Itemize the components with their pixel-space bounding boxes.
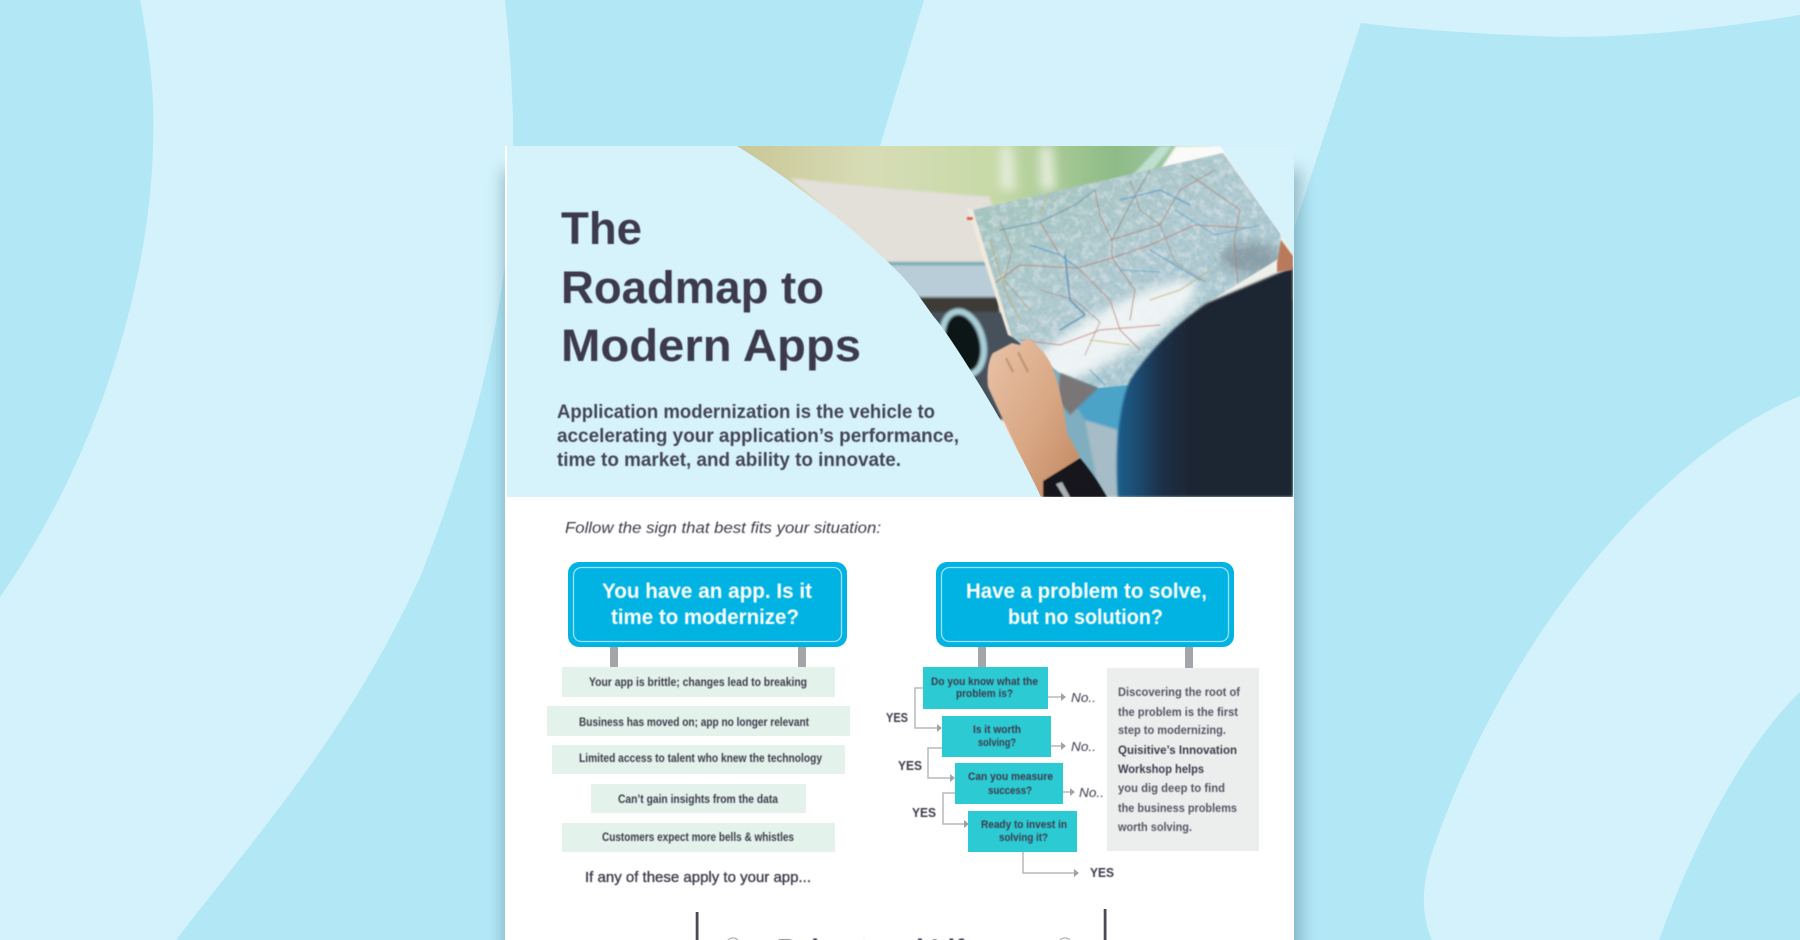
flowchart: problem questions: Is it worth <box>973 724 1021 736</box>
flowchart: problem questions: No.. <box>1079 786 1104 800</box>
intro text: accelerating your application’s performance, <box>557 425 959 447</box>
title: The <box>561 203 642 254</box>
next sign frame, cropped at the page edge <box>696 909 1106 940</box>
panel: symptom list: Can’t gain insights from the data <box>618 794 779 806</box>
panel: symptom list: Limited access to talent who knew the technology <box>579 753 823 765</box>
flowchart: problem questions: Can you measure <box>968 771 1053 783</box>
flowchart: problem questions: YES <box>898 758 922 773</box>
intro text <box>557 401 959 471</box>
flowchart: problem questions: YES <box>1090 865 1114 880</box>
sign: have a problem: but no solution? <box>1008 605 1163 629</box>
map paper <box>966 152 1282 389</box>
panel: workshop note <box>1107 668 1259 851</box>
panel: workshop note: step to modernizing. <box>1118 723 1226 737</box>
intro text: Application modernization is the vehicle to <box>557 401 935 423</box>
flowchart: problem questions: Do you know what the <box>931 676 1038 688</box>
panel: header <box>507 135 1300 500</box>
panel: workshop note: you dig deep to find <box>1118 781 1225 795</box>
panel: workshop note: Discovering the root of <box>1118 685 1241 699</box>
title <box>561 203 861 371</box>
sign: you have an app: You have an app. Is it <box>602 579 812 603</box>
panel: infographic card <box>505 135 1300 940</box>
panel: workshop note: worth solving. <box>1117 820 1192 834</box>
sign: you have an app <box>568 562 847 668</box>
panel: symptom list <box>547 667 850 852</box>
panel: workshop note: Quisitive’s Innovation <box>1118 743 1237 757</box>
flowchart: problem questions: problem is? <box>956 688 1013 700</box>
panel: workshop note: Workshop helps <box>1118 762 1204 776</box>
panel: workshop note: the problem is the first <box>1118 705 1238 719</box>
photo: hands holding a road map in a car <box>730 135 1300 500</box>
caption: if any apply: If any of these apply to your app... <box>585 869 811 886</box>
shadow under the hand on the map <box>1058 373 1098 415</box>
sign: have a problem <box>936 562 1234 668</box>
instruction text: Follow the sign that best fits your situation: <box>565 520 881 537</box>
panel: symptom list: Business has moved on; app no longer relevant <box>579 717 809 729</box>
sign: have a problem: Have a problem to solve, <box>966 579 1207 603</box>
panel: symptom list: Customers expect more bells & whistles <box>602 832 794 844</box>
flowchart: problem questions: solving it? <box>999 832 1048 844</box>
flowchart: problem questions: YES <box>886 710 908 725</box>
left hand holding the map <box>987 338 1107 497</box>
intro text: time to market, and ability to innovate. <box>557 449 901 471</box>
flowchart: problem questions: No.. <box>1071 740 1096 754</box>
flowchart: problem questions: No.. <box>1071 691 1096 705</box>
card drop shadow <box>503 170 1301 940</box>
panel: workshop note: the business problems <box>1118 801 1237 815</box>
flowchart: problem questions: success? <box>988 785 1032 797</box>
sign: you have an app: time to modernize? <box>611 605 799 629</box>
right hand at the map corner <box>1277 240 1293 272</box>
title: Modern Apps <box>561 320 861 371</box>
panel: symptom list: Your app is brittle; changes lead to breaking <box>589 677 807 689</box>
flowchart: problem questions: solving? <box>978 737 1016 749</box>
title: Roadmap to <box>561 262 824 313</box>
flowchart: problem questions <box>886 667 1114 880</box>
person's dark jacket <box>1117 267 1293 497</box>
flowchart: problem questions: Ready to invest in <box>981 819 1067 831</box>
flowchart: problem questions: YES <box>912 805 936 820</box>
